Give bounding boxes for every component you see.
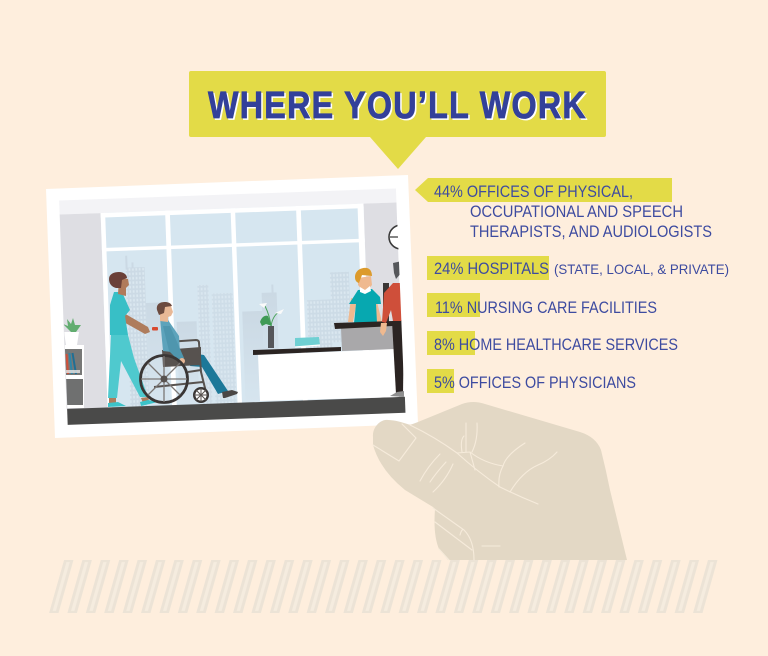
statistics list <box>415 178 729 393</box>
nurse trousers <box>108 335 148 398</box>
window frame <box>101 204 370 408</box>
nurse scrub top <box>110 292 130 335</box>
ceiling band <box>59 188 396 215</box>
reception desk <box>253 268 399 401</box>
item: 44 percent offices of therapists <box>415 178 712 241</box>
man hand <box>380 323 387 336</box>
patient head <box>160 306 173 322</box>
man in red shirt <box>380 261 405 397</box>
upper desk <box>341 326 395 351</box>
label 8 percent: 8% HOME HEALTHCARE SERVICES <box>434 336 678 354</box>
receptionist <box>348 268 382 323</box>
item: 5 percent offices of physicians <box>427 369 636 393</box>
photo: hospital reception <box>46 175 418 438</box>
label 11 percent: 11% NURSING CARE FACILITIES <box>435 299 657 317</box>
room architecture <box>59 188 405 425</box>
photo white border <box>46 175 418 438</box>
label hospitals detail: (STATE, LOCAL, & PRIVATE) <box>554 261 729 277</box>
title banner <box>189 71 606 169</box>
label 44 percent: THERAPISTS, AND AUDIOLOGISTS <box>470 223 712 241</box>
man shoe <box>390 391 404 397</box>
label 44 percent: 44% OFFICES OF PHYSICAL, <box>434 183 633 201</box>
bar 44 percent <box>415 178 672 202</box>
nurse hair <box>109 272 127 288</box>
title: WHERE YOU’LL WORK <box>208 85 587 127</box>
receptionist top <box>349 289 381 323</box>
wheelchair back and seat <box>162 347 201 367</box>
wheelchair armrest frame <box>154 340 206 392</box>
label 44 percent: OCCUPATIONAL AND SPEECH <box>470 203 683 221</box>
label 24 percent: 24% HOSPITALS <box>434 260 549 278</box>
patient in wheelchair <box>140 302 238 402</box>
bookshelf <box>63 345 84 408</box>
receptionist collar <box>360 286 371 294</box>
vase with flowers <box>259 303 284 348</box>
item: 8 percent home healthcare <box>427 331 678 355</box>
city skyline <box>125 248 353 407</box>
label 44 percent <box>434 183 712 241</box>
upper desk counter <box>334 321 393 329</box>
item: 24 percent hospitals <box>427 256 729 280</box>
nurse pushing wheelchair <box>108 272 158 407</box>
label 5 percent: 5% OFFICES OF PHYSICIANS <box>434 374 636 392</box>
nurse shoes <box>108 400 158 407</box>
patient feet <box>222 390 238 398</box>
window sky <box>101 204 370 408</box>
patient legs <box>190 354 228 394</box>
receptionist head <box>358 276 372 290</box>
wheelchair large wheel <box>140 356 188 402</box>
tissue box <box>295 337 320 347</box>
receptionist hair <box>355 268 372 283</box>
nurse ankles <box>109 397 149 403</box>
hand holding photo <box>373 402 627 560</box>
potted plant <box>63 318 81 345</box>
title shadow: WHERE YOU’LL WORK <box>210 86 588 128</box>
patient torso <box>160 318 180 353</box>
left wall column <box>60 213 108 409</box>
right wall column <box>363 202 403 399</box>
hand shape <box>373 402 627 560</box>
monitor back <box>383 283 389 323</box>
banner speech bubble <box>189 71 606 169</box>
lower counter <box>253 347 341 355</box>
man legs <box>392 320 404 394</box>
floor <box>67 397 405 425</box>
nurse arm <box>125 314 150 334</box>
scene figures <box>63 225 413 408</box>
receptionist arms <box>348 298 382 322</box>
patient hair <box>157 302 172 315</box>
patient hand <box>180 358 185 364</box>
bar 24 percent <box>427 256 549 280</box>
bar 11 percent <box>427 293 480 317</box>
hand contour lines <box>373 423 557 560</box>
nurse neck and face <box>118 278 129 296</box>
patient arm <box>163 326 184 362</box>
item: 11 percent nursing care <box>427 293 657 317</box>
wall clock <box>388 224 398 250</box>
bar 8 percent <box>427 331 475 355</box>
ground stripe pattern <box>49 560 718 613</box>
wheelchair small wheel <box>194 388 208 402</box>
man torso <box>382 283 405 323</box>
wheelchair handle <box>152 327 158 330</box>
front desk white panel <box>258 349 399 401</box>
man hair <box>393 261 402 279</box>
bar 5 percent <box>427 369 454 393</box>
